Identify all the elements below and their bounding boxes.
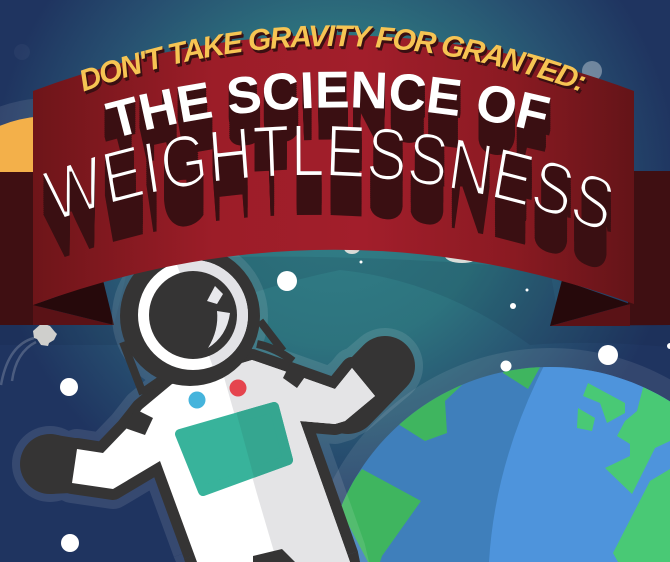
chest pack [180,407,288,491]
title line one: THE SCIENCE OF [104,72,550,161]
asteroid with trails [1,323,57,385]
ribbon left tail [0,172,114,325]
earth [307,348,670,562]
subtitle: DON'T TAKE GRAVITY FOR GRANTED: [80,25,588,94]
moon [0,98,40,172]
ribbon banner [33,35,634,305]
helmet connectors [123,321,293,394]
ocean dark side [326,367,670,562]
red button [230,380,246,396]
earth star [500,360,512,372]
suit shading [224,360,375,562]
crotch [253,549,295,562]
atmosphere [307,348,670,562]
title line two: WEIGHTLESSNESS [43,126,611,268]
astronaut halo [12,238,385,562]
left cuff [125,409,153,435]
helmet [120,246,260,386]
right cuff [283,364,307,388]
ribbon right tail [550,171,670,326]
suit [72,360,375,562]
faint background arc [0,257,670,347]
blue button [188,392,206,408]
gloves and outline [20,360,385,562]
continents [337,360,670,562]
background planet peeking below banner [344,242,479,263]
ocean lit side [489,360,670,562]
astronaut [12,238,400,562]
